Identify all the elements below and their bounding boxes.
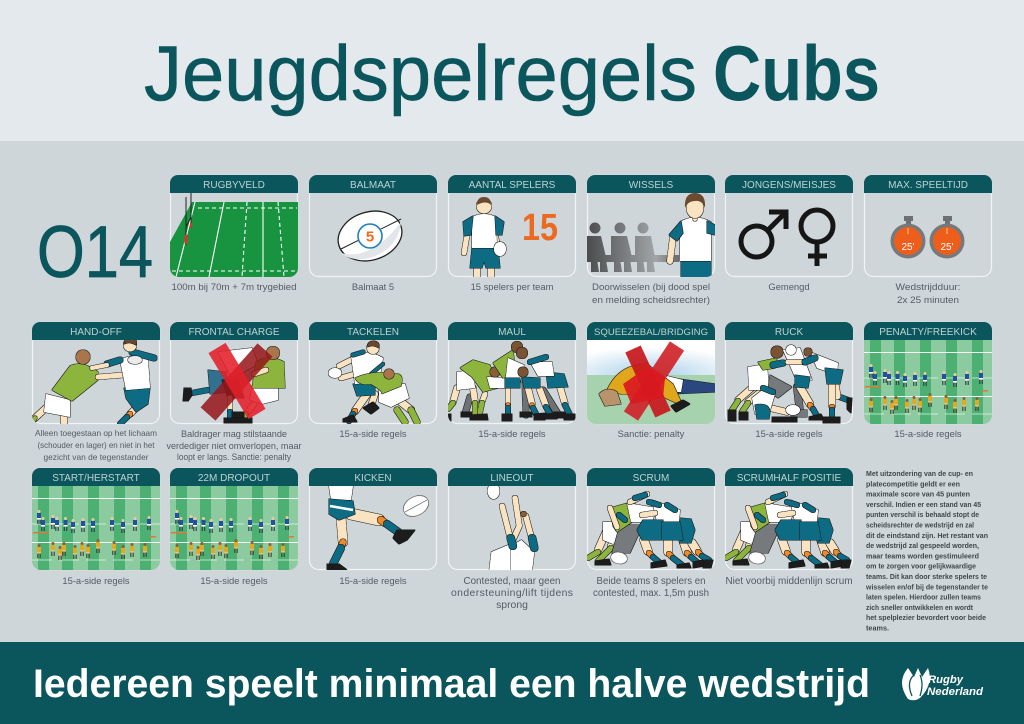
side note text: teams.	[866, 624, 889, 632]
panel header: WISSELS	[629, 180, 674, 191]
panel: scrumhalf positie	[725, 468, 853, 587]
panel: rugbyveld	[170, 175, 298, 292]
icon: stopwatch 1: 25'	[901, 242, 915, 253]
caption line 3: loopt er langs. Sanctie: penalty	[177, 451, 291, 462]
caption: Baldrager mag stilstaande	[181, 428, 287, 439]
panel: wissels	[587, 175, 715, 305]
caption line 3: sprong	[496, 600, 528, 611]
side note text: om te zorgen voor gelijkwaardige	[866, 563, 976, 571]
side note text: Met uitzondering van de cup- en	[866, 470, 973, 478]
panel: aantal spelers	[448, 175, 576, 292]
icon: male symbol	[741, 212, 786, 257]
panel: penalty/freekick	[864, 322, 992, 439]
side note text: platecompetitie geldt er een	[866, 480, 960, 488]
panel header: START/HERSTART	[52, 473, 140, 484]
panel header: SCRUM	[633, 473, 669, 484]
panel: kicken	[309, 468, 437, 586]
caption: 15-a-side regels	[339, 428, 407, 439]
panel: maul	[448, 322, 576, 439]
caption: Contested, maar geen	[464, 576, 561, 587]
caption: Sanctie: penalty	[618, 428, 685, 439]
tackle illustration	[328, 341, 417, 422]
panel header: HAND-OFF	[70, 327, 122, 338]
caption: 15-a-side regels	[755, 428, 823, 439]
caption line 2: en melding scheidsrechter)	[592, 294, 710, 305]
panel: 22m dropout	[170, 468, 298, 586]
icon: ball size 5: 5	[366, 228, 374, 246]
side note text: de wedstrijd zal gespeeld worden,	[866, 542, 979, 550]
panel header	[448, 468, 576, 486]
caption line 2: 2x 25 minuten	[897, 294, 959, 305]
scrum illustration	[726, 494, 851, 568]
panel: frontal charge	[166, 322, 302, 462]
caption: 15-a-side regels	[894, 428, 962, 439]
side note text: het spelplezier bevordert voor beide	[866, 614, 986, 622]
panel header: SQUEEZEBAL/BRIDGING	[594, 327, 708, 338]
side note text	[865, 470, 988, 632]
caption line 2: ondersteuning/lift tijdens	[451, 588, 573, 599]
side note text: punten verschil is behaald stopt de	[866, 511, 979, 519]
caption: Wedstrijdduur:	[896, 281, 960, 292]
caption: 15-a-side regels	[339, 575, 407, 586]
panel: tackelen	[309, 322, 437, 439]
panel: lineout	[448, 468, 576, 611]
footer slogan: Iedereen speelt minimaal een halve wedstrijd	[33, 662, 870, 706]
panel header: BALMAAT	[350, 180, 396, 191]
panel: ruck	[725, 322, 853, 439]
caption line 2: verdediger niet omverlopen, maar	[166, 440, 302, 451]
side note text: maar teams worden gestimuleerd	[866, 552, 979, 560]
panel header: LINEOUT	[490, 473, 534, 484]
side note text: maximale score van 45 punten	[866, 491, 970, 499]
caption: Balmaat 5	[352, 281, 394, 292]
ruck illustration	[728, 345, 852, 423]
panel: jongens/meisjes	[725, 175, 853, 292]
panel: start/herstart	[32, 468, 160, 586]
caption line 2: (schouder en lager) en niet in het	[38, 440, 155, 450]
panel header: JONGENS/MEISJES	[742, 180, 836, 191]
side note text: wisselen en/of bij de tegenstander te	[865, 583, 988, 591]
substitutes and player illustration	[587, 193, 715, 277]
footer band	[0, 642, 1024, 724]
caption: Niet voorbij middenlijn scrum	[726, 576, 852, 587]
side note text: verschil. Indien er een stand van 45	[866, 501, 981, 509]
pitch with players	[32, 486, 160, 570]
hand-off illustration	[33, 337, 154, 426]
logo: Rugby Nederland: Nederland	[927, 686, 983, 698]
squeeze ball illustration with red cross	[587, 340, 715, 424]
lineout illustration	[488, 483, 534, 570]
panel header: TACKELEN	[347, 327, 399, 338]
kicking leg illustration	[327, 486, 432, 570]
scrum illustration	[588, 494, 713, 568]
side note text: zich sneller ontwikkelen en wordt	[866, 604, 974, 612]
icon: female symbol	[801, 210, 833, 266]
panel header: 22M DROPOUT	[198, 473, 270, 484]
caption: Alleen toegestaan op het lichaam	[35, 428, 157, 438]
number of players: 15	[522, 207, 558, 249]
panel header: KICKEN	[354, 473, 392, 484]
icon: stopwatch 2: 25'	[940, 242, 954, 253]
side note text: scheidsrechter de wedstrijd en zal	[866, 522, 974, 530]
panel header: RUCK	[775, 327, 803, 338]
caption: 15-a-side regels	[62, 575, 130, 586]
panel header: PENALTY/FREEKICK	[879, 327, 977, 338]
panel header: RUGBYVELD	[203, 180, 265, 191]
maul illustration	[448, 342, 575, 421]
panel header: MAX. SPEELTIJD	[888, 180, 968, 191]
panel: scrum	[587, 468, 715, 599]
field illustration	[170, 193, 298, 277]
caption: 15 spelers per team	[471, 281, 554, 292]
panel header: SCRUMHALF POSITIE	[737, 473, 842, 484]
title: Cubs	[713, 29, 880, 117]
side note text: teams. Dit kan door sterke spelers te	[866, 573, 987, 581]
logo: Rugby Nederland: Rugby	[928, 674, 964, 686]
panel header: MAUL	[498, 327, 526, 338]
logo: Rugby Nederland	[902, 668, 983, 700]
header band	[0, 0, 1024, 141]
caption: Gemengd	[768, 281, 810, 292]
caption: 100m bij 70m + 7m trygebied	[172, 281, 296, 292]
side note text: dit de eindstand zijn. Het restant van	[866, 532, 988, 540]
pitch with players	[864, 340, 992, 424]
panel: hand-off	[32, 322, 160, 462]
side note text: laten spelen. Hierdoor zullen teams	[866, 594, 981, 602]
caption: 15-a-side regels	[200, 575, 268, 586]
panel: max. speeltijd	[864, 175, 992, 305]
caption line 3: gezicht van de tegenstander	[44, 452, 149, 462]
panel header: AANTAL SPELERS	[469, 180, 556, 191]
caption line 2: contested, max. 1,5m push	[593, 588, 709, 599]
caption: 15-a-side regels	[478, 428, 546, 439]
player illustration	[463, 197, 506, 277]
age group label: O14	[37, 212, 153, 293]
panel header: FRONTAL CHARGE	[188, 327, 280, 338]
caption: Beide teams 8 spelers en	[596, 576, 706, 587]
title: Jeugdspelregels	[144, 29, 697, 117]
panel: squeezebal/bridging	[587, 322, 715, 439]
pitch with players	[170, 486, 298, 570]
caption: Doorwisselen (bij dood spel	[592, 281, 710, 292]
frontal charge illustration with red cross	[183, 346, 285, 423]
panel: balmaat	[309, 175, 437, 292]
